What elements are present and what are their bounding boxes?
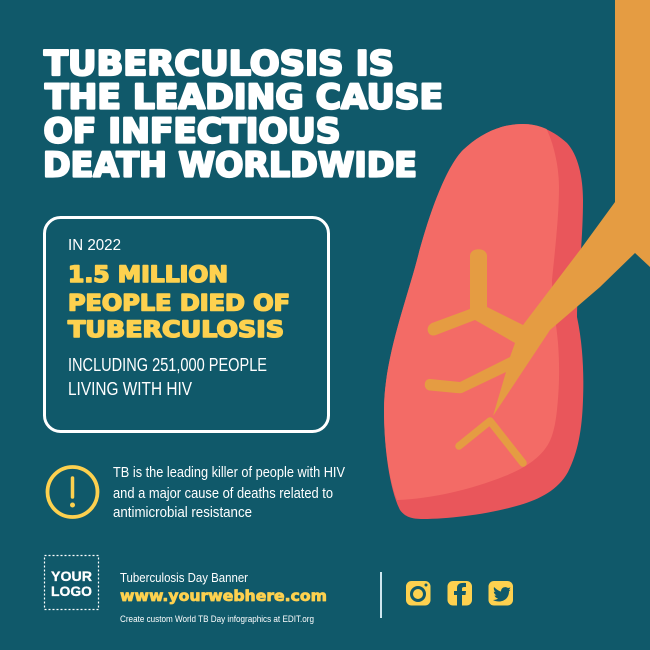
title: TUBERCULOSIS IS xyxy=(44,44,394,83)
HIV detail xyxy=(68,355,267,399)
icon: instagram xyxy=(406,581,430,606)
title: THE LEADING CAUSE xyxy=(45,78,443,116)
year label: IN 2022 xyxy=(68,237,121,254)
stat panel xyxy=(44,218,328,432)
logo placeholder: LOGO xyxy=(51,583,92,599)
warning text: antimicrobial resistance xyxy=(113,505,252,521)
headline statistic: PEOPLE DIED OF xyxy=(68,290,290,316)
footer website: www.yourwebhere.com xyxy=(120,587,327,605)
bronchi lower branch xyxy=(459,421,523,463)
headline statistic: TUBERCULOSIS xyxy=(68,317,284,343)
HIV detail: INCLUDING 251,000 PEOPLE xyxy=(68,355,267,375)
footer banner name: Tuberculosis Day Banner xyxy=(120,570,249,585)
headline statistic xyxy=(68,262,290,343)
lung dark outer shape xyxy=(384,124,583,519)
lung light front shape xyxy=(384,124,559,500)
bronchi main trunk and upper branches xyxy=(425,0,650,416)
footer credit: Create custom World TB Day infographics at EDIT.org xyxy=(120,614,314,625)
icon: warning xyxy=(48,467,98,517)
headline statistic: 1.5 MILLION xyxy=(68,262,228,288)
logo placeholder: YOUR xyxy=(51,568,92,584)
title xyxy=(43,44,443,184)
icon: twitter xyxy=(488,581,513,606)
warning text: and a major cause of deaths related to xyxy=(113,486,333,502)
warning text xyxy=(113,465,345,521)
icon: facebook xyxy=(448,581,472,606)
footer divider xyxy=(380,572,382,618)
panel border xyxy=(44,218,328,432)
HIV detail: LIVING WITH HIV xyxy=(68,379,192,399)
illustration: lung and bronchi xyxy=(384,0,650,519)
title: DEATH WORLDWIDE xyxy=(43,146,417,184)
title: OF INFECTIOUS xyxy=(44,112,341,150)
warning text: TB is the leading killer of people with HIV xyxy=(113,465,345,481)
logo placeholder xyxy=(44,556,98,610)
